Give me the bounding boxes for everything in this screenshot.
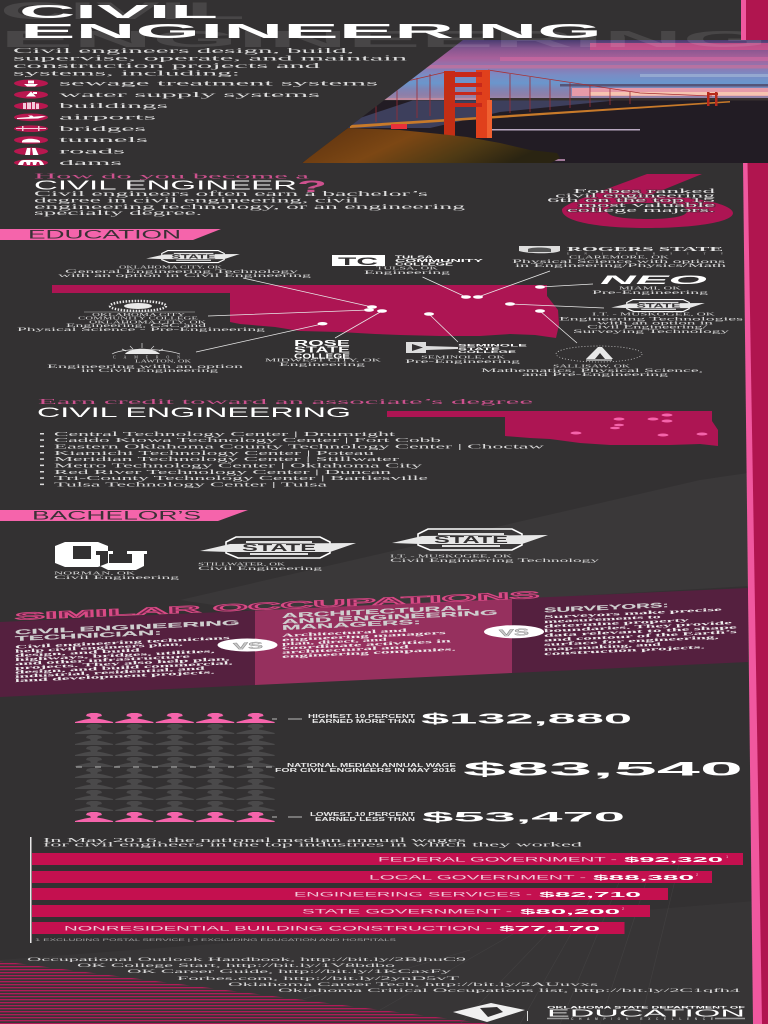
panel: civil engineering technician: highways, bridges, utilities, [15,649,218,663]
list: technology centers: Meridian Technology Center | Stillwater [54,457,399,463]
college: Cameron University: LAWTON, OK [135,358,191,364]
college: OSU Institute of Technology Muskogee: Civil Engineering/ [587,326,709,331]
logo: Cameron sun [112,343,180,354]
college: Rogers State University: ROGERS STATE [567,247,723,253]
icon: sewage treatment [14,80,48,87]
callout: ranked 6th by Forbes: 6th on the top 15 [547,198,715,204]
list: technology centers: Kiamichi Technology Center | Poteau [54,451,374,457]
logo: OSU IT [611,300,705,312]
stat: lowest 10 percent [310,808,626,824]
icon: dams [14,159,48,166]
decorative wedge: crimson stripes [0,961,490,1024]
bachelor's: OSU IT Muskogee: I.T. - MUSKOGEE, OK [390,554,512,560]
panel: civil engineering technician: help civil engineers plan, [15,642,186,655]
stat: highest 10 percent [308,712,632,728]
bar: engineering services: ENGINEERING SERVICES - [294,892,532,898]
bar: federal government [32,853,743,865]
logo: Carl Albert seal [556,346,642,362]
logo: Oklahoma State Department of Education [453,1003,747,1022]
badge: VS right [484,625,544,639]
logo: OSU IT: STATE [434,535,509,546]
title: CIVIL [19,2,218,22]
college: Carl Albert State College: and Pre-Engineering [522,373,670,378]
bar: local government: LOCAL GOVERNMENT - [369,874,586,882]
panel: surveyors: Surveyors make precise [544,608,722,620]
list: technology centers: Tulsa Technology Center | Tulsa [54,482,329,488]
panel: architectural and engineering managers: ARCHITECTURAL [282,605,470,620]
banner: education [0,229,221,242]
photo: Golden Gate bridge at sunset [300,40,768,165]
panel: architectural and engineering managers [255,599,512,685]
stat: lowest 10 percent: EARNED LESS THAN [315,817,415,823]
panel: architectural and engineering managers: architectural and [282,645,410,656]
bar: federal government: FEDERAL GOVERNMENT - [378,856,617,864]
college: OSU Institute of Technology Muskogee: Engineering Technologies [559,318,743,322]
badge: VS left [218,638,278,653]
panel: architectural and engineering managers: engineering managers [282,631,446,643]
college: Northeastern Oklahoma A&M [592,273,710,296]
ghost title behind heading [0,0,768,52]
list of project types with icons: sewage treatment systems [59,80,379,88]
stat: lowest 10 percent: $53,470 [422,808,626,824]
sources: Forbes.com, http://bit.ly/2ynD5vT [177,976,462,982]
title [19,2,602,43]
college: Tulsa Community College [332,254,484,276]
panel: architectural and engineering managers: AND ENGINEERING [282,610,498,626]
logo: NEO: NEO [600,273,710,287]
panel: surveyors: surface for engineering, [544,635,722,648]
bachelor's: Oklahoma State University Stillwater: STILLWATER, OK [198,562,285,568]
bar: state government: 2 [622,906,625,911]
college: Seminole State College: SEMINOLE [458,344,529,348]
icon: water supply [14,91,48,98]
stat: lowest 10 percent: LOWEST 10 PERCENT [310,812,416,818]
stat: national median wage: $83,540 [463,758,744,780]
panel: surveyors: map-making, and [544,643,662,653]
panel: architectural and engineering managers: plan, direct, and [282,638,388,647]
list: technology centers: Tri-County Technology Center | Bartlesville [54,476,430,482]
bachelor's: OSU IT Muskogee [390,529,601,564]
text block: degree description: specialty degree. [34,210,203,217]
logo: Seminole arrow [406,342,458,353]
college: Rogers State University [512,246,728,269]
logo: RSU shield [519,246,560,253]
bar: local government: 2 [696,872,699,877]
stat: national median wage: NATIONAL MEDIAN ANNUAL WAGE [287,763,456,769]
right stripe: lower [743,163,768,1024]
panel: surveyors: measurements to [544,615,663,625]
college: Rogers State University: CLAREMORE, OK [569,254,669,260]
college: OSU Institute of Technology Muskogee: Surveying Technology [573,330,731,335]
bar: engineering services: $82,710 [539,890,641,899]
callout: ranked 6th by Forbes [547,174,733,228]
college: Cameron University: Engineering with an option [47,365,245,370]
heading: how do you become a civil engineer: How do you become a [34,172,312,180]
panel: surveyors: determine property [544,618,691,630]
logo: OKCCC seal [84,301,195,312]
college: Tulsa Community College: COLLEGE [395,262,454,267]
panel: surveyors: data relevant to the shape [544,625,737,639]
icon: buildings [14,102,48,110]
bachelor's: Oklahoma State University Stillwater: Civil Engineering [198,567,324,572]
icon: airports [14,114,48,121]
college: OSU Institute of Technology Muskogee: I.T. - MUSKOGEE, OK [592,312,715,318]
heading: similar occupations: SIMILAR OCCUPATIONS [15,590,541,623]
panel: civil engineering technician: projects. They also help plan, [15,657,233,671]
callout: ranked 6th by Forbes: civil engineering [555,194,715,200]
banner: education: EDUCATION [28,230,181,242]
logo: OSU OKC [146,251,240,263]
stat: national median wage: FOR CIVIL ENGINEERS IN MAY 2016 [275,768,456,774]
college: Cameron University: CAMERON [113,354,180,359]
college: Northeastern Oklahoma A&M: Pre-Engineering [592,291,710,296]
logo: Rose State [294,338,351,360]
bachelor's: University of Oklahoma [54,542,181,581]
list: technology centers: Metro Technology Center | Oklahoma City [54,463,422,469]
panel: civil engineering technician: CIVIL ENGINEERING [15,620,240,636]
college: Seminole State College: Pre-Engineering [405,360,522,365]
banner: bachelor's: BACHELOR’S [32,510,202,522]
bachelor's: University of Oklahoma: Civil Engineering [54,576,181,581]
panel: architectural and engineering managers: engineering companies. [282,647,456,660]
badge: VS right: VS [499,627,529,639]
list of project types with icons: water supply systems [59,91,321,99]
sources: Occupational Outlook Handbook, http://bit.ly/2BjhuC9 [27,957,467,963]
college: Tulsa Community College: COMMUNITY [395,258,484,263]
map: technology center locations [387,411,718,446]
bar chart: top industries: for civil engineers in the top industries in which they worked [43,841,582,848]
logo: OU [55,542,147,570]
bar: nonresidential building construction: $77,170 [499,924,600,933]
heading: earn credit toward associate's degree: CIVIL ENGINEERING [37,404,351,420]
college: OSU Institute of Technology Muskogee [559,300,743,335]
stat: highest 10 percent: HIGHEST 10 PERCENT [308,714,416,720]
bar: state government: STATE GOVERNMENT - [302,908,512,916]
logo: Rose State: STATE [294,346,351,354]
text block: degree description: degree in civil engineering, civil [34,197,359,204]
bar: nonresidential building construction: NONRESIDENTIAL BUILDING CONSTRUCTION - [64,926,492,932]
logo: Rose State: ROSE [294,338,351,348]
college: Rogers State University: U N I V E R S I T Y [567,251,724,255]
college: Carl Albert State College: Mathematics, Physical Science, [481,369,703,374]
logo: OSU IT: STATE [636,304,681,309]
pictogram: ten rows of workers [75,713,302,823]
sources: Oklahoma Career Tech, http://bit.ly/2AUuvxs [228,982,598,988]
stat: highest 10 percent: $132,880 [421,712,632,728]
heading: how do you become a civil engineer: CIVIL ENGINEER [34,178,297,192]
callout: ranked 6th by Forbes: most valuable [578,203,716,209]
list: technology centers: Caddo Kiowa Technology Center | Fort Cobb [54,438,441,444]
logo: OSU [200,537,356,558]
panel: civil engineering technician: land development projects. [15,670,215,684]
college: OSU-OKC: with an option in Civil Engineering [58,274,313,279]
text block: degree description: Civil engineers often earn a bachelor’s [34,191,429,198]
heading: earn credit toward associate's degree: Earn credit toward an associate’s degree [38,398,533,406]
college: Tulsa Community College: TULSA, OK [376,266,438,272]
college: Oklahoma City Community College: COMMUNITY COLLEGE [78,316,200,320]
college: Oklahoma City Community College: Engineering, CSC and [66,324,208,329]
college: Oklahoma City Community College: OKLAHOMA CITY, OK [89,320,206,326]
list of project types with icons: buildings [59,102,169,110]
logo: Oklahoma State Department of Education: EDUCATION [547,1008,745,1020]
logo: Rose State: COLLEGE [294,354,351,360]
college: OSU-OKC: OKLAHOMA CITY, OK [119,264,222,270]
bachelor's: OSU IT Muskogee: Civil Engineering Technology [390,559,601,564]
college: Cameron University [47,343,245,374]
logo mark: graduation cap [453,1003,528,1022]
bar chart: top industries: In May 2016, the national median annual wages [43,838,469,844]
intro paragraph: systems, including: [13,70,240,78]
bachelor's: Oklahoma State University Stillwater [198,537,356,572]
right stripe: top [741,0,768,40]
stat: national median wage [275,758,744,780]
logo: Oklahoma State Department of Education: OKLAHOMA STATE DEPARTMENT OF [547,1004,747,1010]
panel: surveyors [512,588,748,673]
list: technology centers [40,432,547,488]
college: OSU Institute of Technology Muskogee: with an option in [597,321,715,326]
intro paragraph: construction projects and [13,62,322,70]
logo: TCC [332,255,385,268]
college: Cameron University: in Civil Engineering [81,369,220,374]
location dots [318,285,545,325]
panel: architectural and engineering managers: coordinate activities in [282,639,452,652]
bar: engineering services [32,888,668,900]
sources: OK College Start, http://bit.ly/1V8bdbo [77,963,396,969]
list of project types with icons: bridges [59,125,147,133]
list: technology centers: Red River Technology Center | Duncan [54,470,391,476]
icon: bridges [14,125,48,132]
college: Oklahoma City Community College [17,301,267,333]
panel: surveyors: and contour of the Earth’s [544,630,737,643]
logo: Oklahoma State Department of Education: CHAMPION EXCELLENCE [571,1017,714,1021]
bridge [350,70,730,138]
text block: degree description: engineering technology, or an engineering [34,204,467,211]
logo: TCC: TC [338,256,378,268]
college: Rose State College [265,338,381,368]
college: Rose State College: Engineering [279,363,367,368]
logo: OSU IT [392,529,548,550]
sources: Oklahoma Critical Occupations list, http://bit.ly/2C1qfh4 [278,987,741,994]
college: Seminole State College: SEMINOLE, OK [421,354,505,360]
intro paragraph: Civil engineers design, build, [13,47,355,55]
callout: ranked 6th by Forbes: Forbes ranked [573,189,715,195]
list of project types with icons: dams [59,159,123,167]
ghost title behind heading: ENGINEERING [0,26,768,52]
bar: federal government: 1 [726,854,729,859]
bachelor's: University of Oklahoma: NORMAN, OK [54,570,135,576]
icon: tunnels [14,136,48,144]
callout: ranked 6th by Forbes: college majors. [567,208,717,214]
bar: local government [32,871,712,883]
panel: surveyors: construction projects. [544,645,705,657]
panel: architectural and engineering managers: Architectural and [282,629,408,639]
panel: civil engineering technician [0,610,255,697]
list of project types with icons: airports [59,114,157,122]
college: Carl Albert State College: SALLISAW, OK [553,364,630,370]
heading: how do you become a civil engineer [34,172,327,196]
panel: civil engineering technician: design, and build commercial, [15,661,236,676]
list of project types with icons: roads [59,148,126,156]
bar: federal government: $92,320 [624,855,723,864]
college: OSU-OKC: General Engineering Technology [65,270,300,275]
college: OSU-OKC [58,251,313,279]
panel: surveyors: boundaries. They provide [544,621,732,634]
heading: earn credit toward associate's degree [37,398,533,420]
intro paragraph [13,47,409,78]
banner: bachelor's [0,510,248,522]
bar: state government [32,905,650,917]
map of Oklahoma with college locations [52,271,604,352]
heading: how do you become a civil engineer: ? [297,177,327,196]
title: ENGINEERING [20,20,602,43]
panel: civil engineering technician: and other infrastructure [15,655,190,667]
college: Carl Albert State College [481,346,703,378]
list: technology centers: Central Technology Center | Drumright [54,432,396,438]
big numeral 6 [562,174,733,228]
college: Tulsa Community College: Engineering [364,271,452,276]
leader lines [196,271,604,352]
icon: roads [14,148,48,155]
panel: civil engineering technician: industrial, residential, and [15,667,206,680]
bar: state government: $80,200 [520,907,620,916]
footnote: 1 EXCLUDING POSTAL SERVICE | 2 EXCLUDING EDUCATION AND HOSPITALS [35,937,397,942]
badge: VS left: VS [233,640,263,653]
sources: OK Career Guide, http://bit.ly/1KCaxFy [127,969,452,975]
college: Seminole State College: STATE [458,347,502,351]
panel: civil engineering technician: design, and build [15,648,141,659]
bar: local government: $88,380 [593,873,694,882]
college: Seminole State College [405,342,529,365]
college: Oklahoma City Community College: OKLAHOMA CITY [92,313,186,317]
list of project types with icons: tunnels [59,136,149,144]
panel: architectural and engineering managers: MANAGERS: [282,619,421,632]
panel: civil engineering technician: TECHNICIAN: [15,630,162,643]
college: Rogers State University: in Engineering/Physics/Math [515,264,728,269]
college: Oklahoma City Community College: Physical Science - Pre-Engineering [17,328,267,333]
college: Tulsa Community College: TULSA [395,254,433,259]
list: technology centers: Eastern Oklahoma County Technology Center | Choctaw [54,444,547,450]
text block: degree description [34,191,467,217]
logo: OSU: STATE [242,543,317,554]
stat: highest 10 percent: EARNED MORE THAN [312,719,415,725]
sources [27,957,741,994]
list of project types with icons [14,80,379,167]
panel: civil engineering technician: Civil engineering technicians [15,636,230,650]
bar: nonresidential building construction [32,922,624,934]
college: Rose State College: MIDWEST CITY, OK [265,358,381,364]
college: Seminole State College: COLLEGE [458,350,517,354]
college: Northeastern Oklahoma A&M: MIAMI, OK [619,286,681,292]
college: Rogers State University: Physical Science with options [512,260,725,265]
panel: surveyors: SURVEYORS: [544,602,669,614]
intro paragraph: supervise, operate, and maintain [13,54,409,62]
logo: OSU OKC: STATE [171,255,216,260]
bar chart: top industries [30,837,743,943]
